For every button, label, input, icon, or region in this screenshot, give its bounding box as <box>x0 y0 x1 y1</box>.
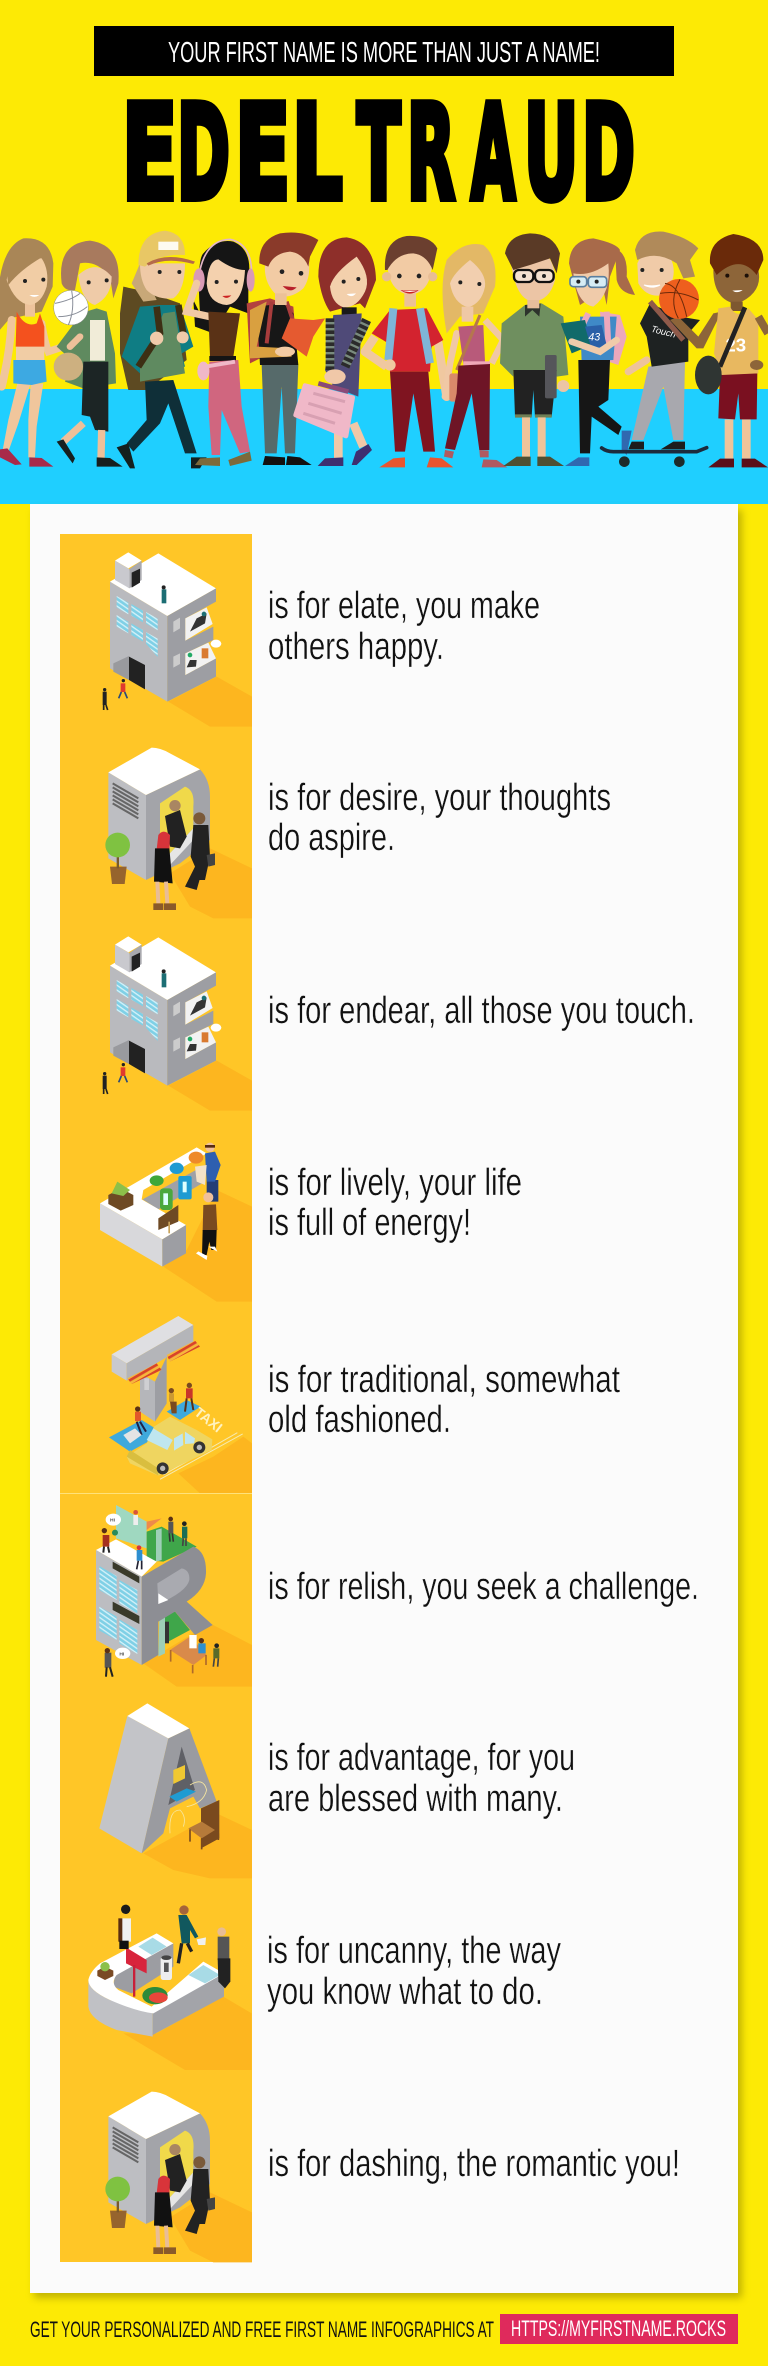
panel: white card shadow <box>34 510 742 2298</box>
row: E second <box>103 936 695 1111</box>
title: name: A <box>471 78 515 229</box>
text: U line: you know what to do. <box>267 1971 543 2013</box>
footer call to action: GET YOUR PERSONALIZED AND FREE FIRST NAME INFOGRAPHICS AT <box>30 2317 494 2342</box>
text: A line: are blessed with many. <box>268 1778 563 1820</box>
icon: L recycling counter <box>100 1143 252 1302</box>
icon: D door repeat <box>105 2092 252 2262</box>
row: E <box>103 552 540 727</box>
row: D second <box>105 2092 680 2262</box>
title: name: D <box>582 79 635 230</box>
blue floor band <box>0 389 768 504</box>
icon: T taxi stand: TAXI <box>191 1404 226 1435</box>
title: name: T <box>357 79 401 230</box>
text: T line: old fashioned. <box>268 1399 451 1441</box>
title: name: L <box>292 78 343 229</box>
icon: R building: HI <box>119 1651 125 1657</box>
panel: white card <box>30 504 738 2293</box>
illustration: crowd of people <box>0 231 768 468</box>
row: U <box>88 1905 561 2070</box>
text: D line: is for desire, your thoughts <box>268 777 611 819</box>
icon: R building: HI <box>110 1518 116 1524</box>
illustration: crowd of people: 23 <box>725 335 746 356</box>
icon: T taxi stand <box>109 1316 252 1493</box>
icon: A building <box>99 1703 252 1878</box>
row: D <box>105 748 611 918</box>
row: A <box>99 1703 575 1878</box>
icon: E building repeat <box>103 936 252 1111</box>
icon: D door <box>105 748 252 918</box>
text: A line: is for advantage, for you <box>268 1737 575 1779</box>
text: E line: is for elate, you make <box>268 585 540 627</box>
icon: U counter <box>88 1905 252 2070</box>
title: name <box>122 77 635 230</box>
row: L <box>100 1143 522 1302</box>
icon: R building <box>96 1505 252 1687</box>
title: name: R <box>407 78 455 230</box>
text: E line: others happy. <box>268 626 444 668</box>
text: L line: is full of energy! <box>268 1202 471 1244</box>
text: U line: is for uncanny, the way <box>267 1930 561 1972</box>
icon: E building <box>103 552 252 727</box>
panel: orange column <box>60 534 252 2262</box>
illustration: crowd of people: 43 <box>588 332 600 344</box>
title: name: U <box>524 79 578 229</box>
text: T line: is for traditional, somewhat <box>268 1359 620 1401</box>
title: name: E <box>122 77 177 229</box>
row: T <box>109 1316 620 1493</box>
row: R <box>96 1505 699 1687</box>
tagline bar <box>94 26 674 76</box>
title: name: D <box>177 79 230 230</box>
illustration: crowd of people: Touch <box>650 324 677 340</box>
row divider <box>60 1493 252 1494</box>
title: name: E <box>235 77 290 229</box>
text: D line: do aspire. <box>268 817 395 859</box>
text: L line: is for lively, your life <box>268 1162 522 1204</box>
